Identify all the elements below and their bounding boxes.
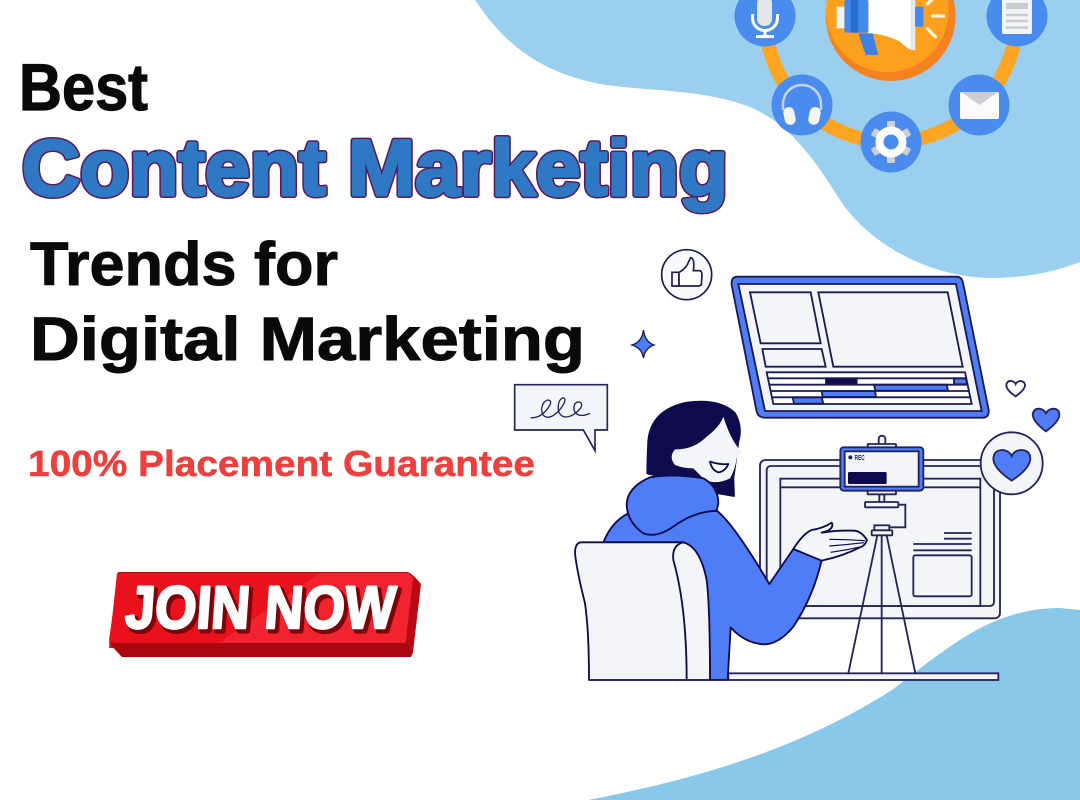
screen frame: [732, 277, 989, 418]
title: Trends for: Trends for: [30, 230, 338, 298]
timeline tracks: [767, 372, 972, 404]
face: [672, 417, 742, 482]
title: Content Marketing: Content Marketing: [22, 123, 728, 212]
button: join now: JOIN NOW: [123, 574, 398, 641]
speech bubble: [515, 385, 607, 451]
icon: thumbs up: [662, 250, 712, 300]
icon: megaphone badge: [826, 0, 956, 81]
title: Best: Best: [19, 50, 148, 124]
icon: sparkle: [632, 330, 654, 358]
hair: [647, 402, 740, 496]
icon: blue heart: [1033, 409, 1059, 431]
illustration: desktop monitor, tripod and phone: [728, 381, 1059, 680]
icon: small heart outline: [1006, 381, 1025, 396]
orange ring: [765, 0, 1017, 142]
desk: [728, 673, 998, 680]
title: Content Marketing: Content Marketing: [22, 123, 728, 212]
illustration: presenter in chair: [575, 402, 867, 680]
subtitle: placement guarantee: 100% Placement Guarantee: [28, 443, 535, 484]
icon: heart badge: [981, 432, 1043, 494]
icon: gear: [860, 112, 922, 172]
icon: headphones: [772, 74, 832, 136]
page content lines: [913, 533, 972, 550]
monitor: [760, 460, 1000, 618]
icon: document: [986, 0, 1048, 46]
icon: microphone: [734, 0, 796, 46]
phone recording: REC: [855, 455, 865, 462]
background blob: top right: [475, 0, 1080, 278]
hood: [627, 476, 718, 535]
phone recording: [840, 447, 923, 491]
preview panels: [750, 292, 963, 367]
button: join now: JOIN NOW: [126, 577, 401, 644]
chair: [575, 542, 710, 680]
background blob: bottom right: [588, 608, 1080, 800]
mouth: [710, 462, 728, 472]
hoodie body and arm: [603, 511, 822, 680]
illustration: timeline editor screen: [732, 277, 989, 418]
icon: envelope: [948, 74, 1010, 136]
title: Digital Marketing: Digital Marketing: [30, 305, 585, 373]
hand: [793, 523, 867, 561]
tripod: [848, 535, 915, 673]
icon ring: marketing channels: [734, 0, 1048, 172]
